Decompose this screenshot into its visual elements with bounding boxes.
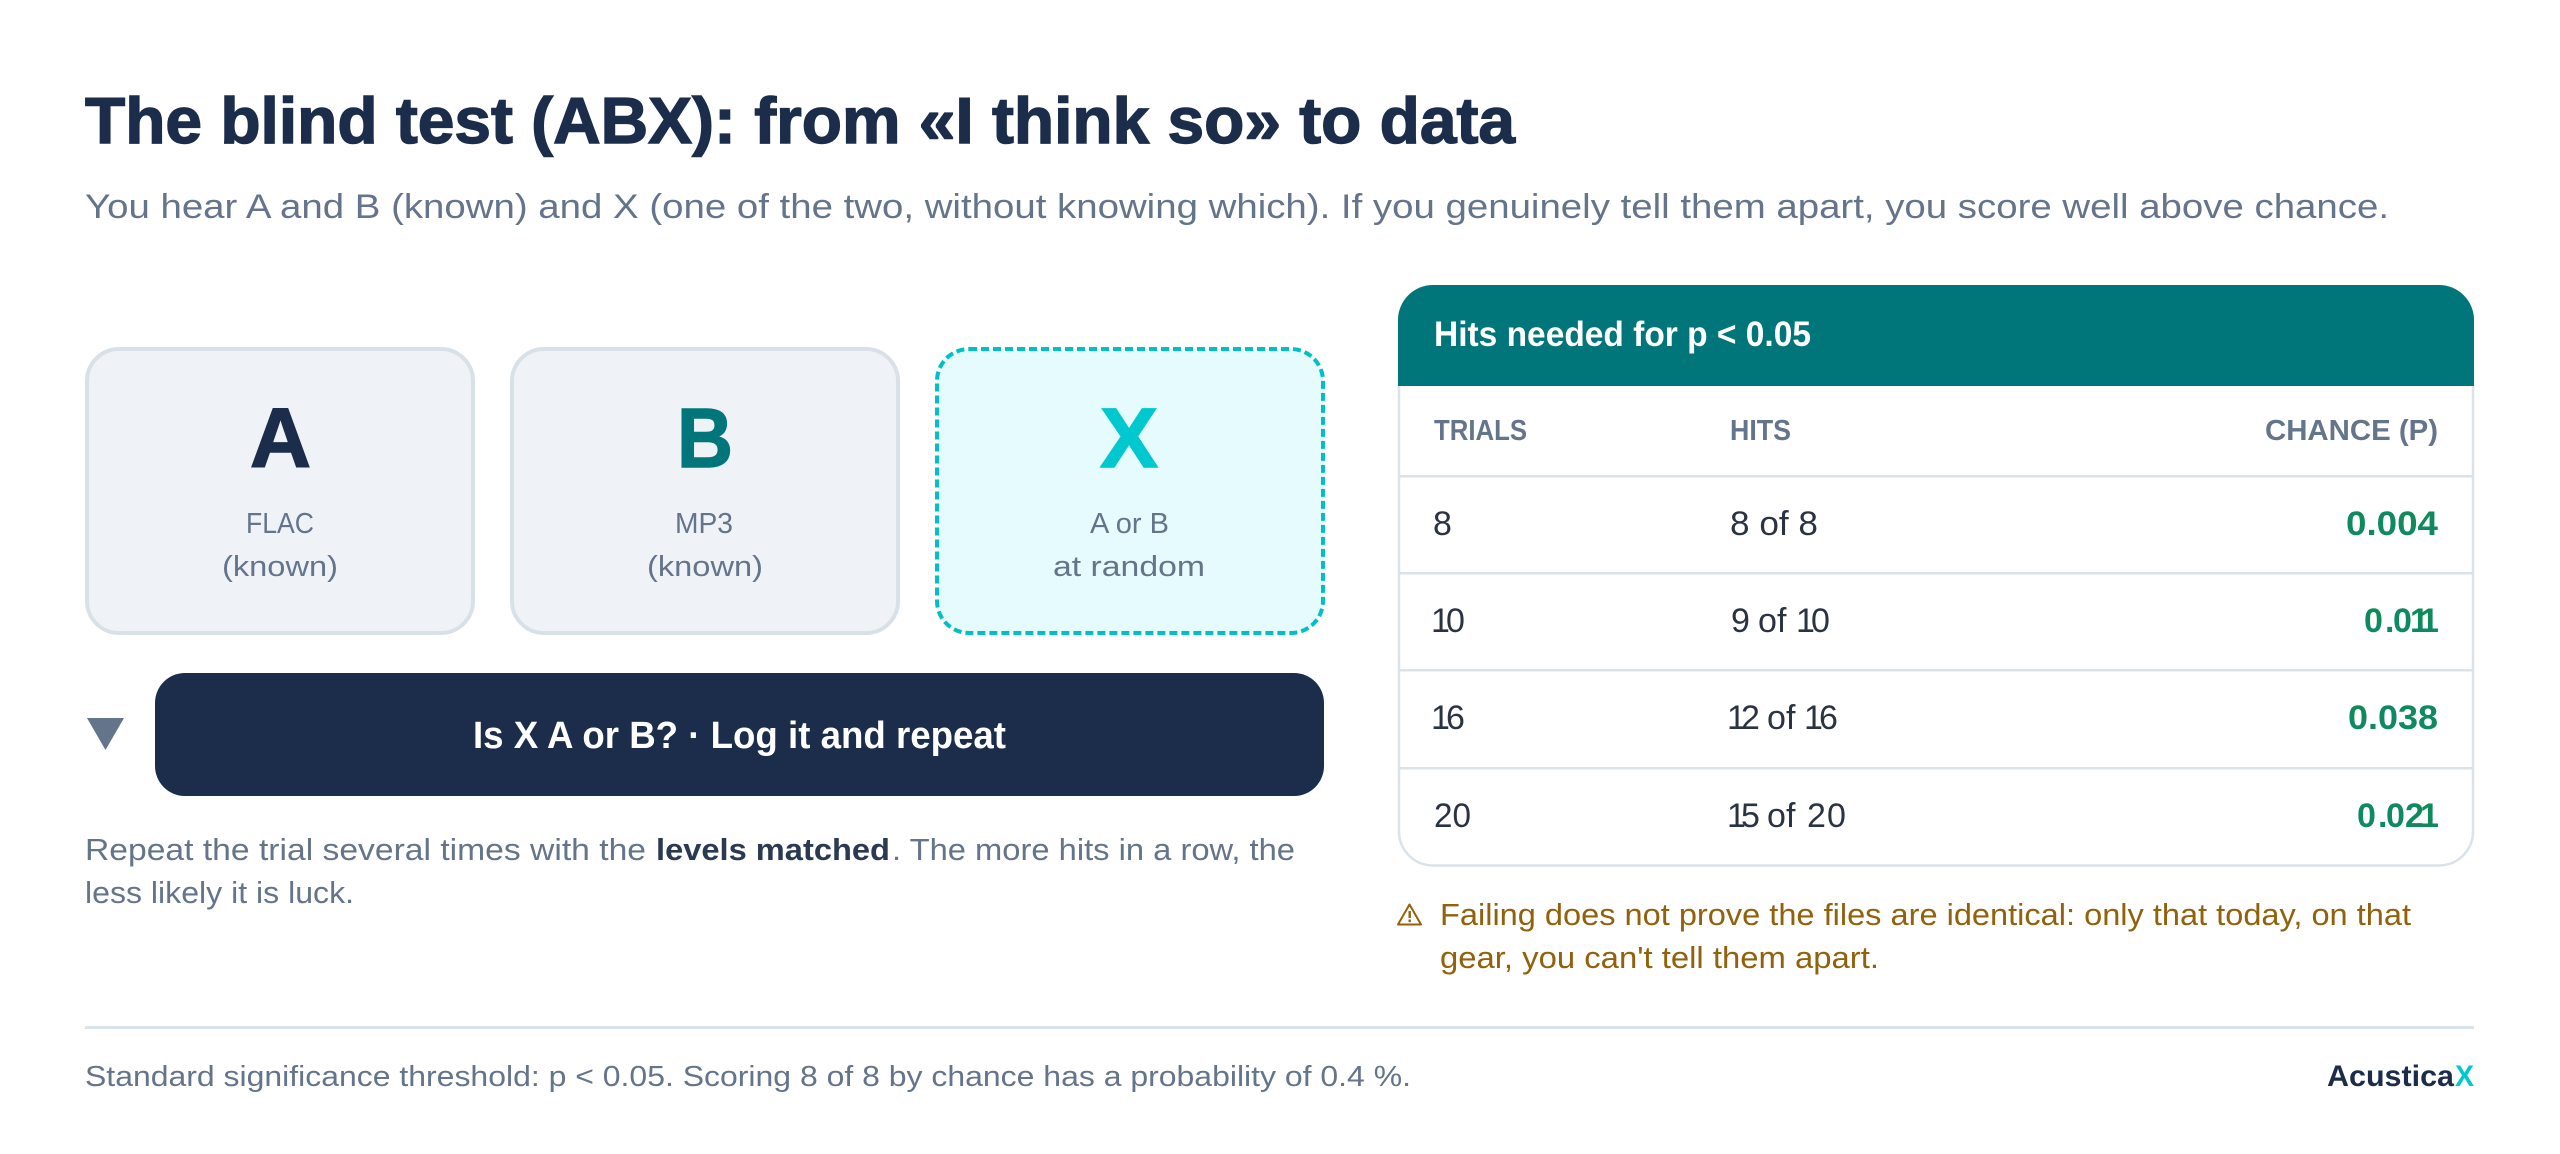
table header band: Hits needed for p < 0.05: [1434, 315, 1811, 354]
letter B: B: [677, 391, 733, 485]
letter X: X: [1100, 391, 1158, 485]
action bar: [155, 673, 1324, 796]
label: FLAC (known): (known): [222, 551, 338, 583]
label: FLAC (known): [222, 508, 338, 583]
explanatory text: Repeat the trial several times with the: [85, 832, 646, 867]
row: 10 trials: 10: [1431, 602, 1465, 640]
title: The blind test (ABX): from «I think so» to data: [85, 84, 1516, 157]
row: 20 trials: 0.021: [2357, 797, 2439, 835]
row: 16 trials: 16: [1431, 699, 1465, 737]
warning note: [1440, 897, 2411, 975]
row: 16 trials: 0.038: [2348, 699, 2438, 737]
brand logo: Acustica: [2327, 1060, 2454, 1093]
row: 10 trials: 9 of 10: [1731, 602, 1830, 640]
column headings: TRIALS: [1434, 415, 1527, 447]
action bar: Is X A or B? · Log it and repeat: [473, 715, 1006, 757]
icon: down arrow: [87, 718, 124, 750]
panel: card B: [512, 349, 898, 633]
icon: warning: [1398, 904, 1421, 924]
label: FLAC (known): FLAC: [246, 508, 314, 540]
row: 8 trials: 0.004: [2346, 505, 2438, 543]
explanatory text: levels matched: [656, 832, 890, 867]
row: 16 trials: 12 of 16: [1727, 699, 1838, 737]
explanatory text: less likely it is luck.: [85, 875, 354, 910]
row: 10 trials: [1431, 602, 2439, 640]
footer note: Standard significance threshold: p < 0.05. Scoring 8 of 8 by chance has a probability of 0.4 %.: [85, 1061, 1411, 1093]
label: MP3 (known): [647, 508, 763, 583]
label: A or B at random: [1053, 508, 1205, 583]
column headings: HITS: [1730, 415, 1791, 447]
brand logo: X: [2455, 1060, 2474, 1093]
column headings: CHANCE (P): [2265, 415, 2438, 447]
label: A or B at random: A or B: [1090, 508, 1169, 540]
explanatory text: . The more hits in a row, the: [892, 832, 1295, 867]
warning note: Failing does not prove the files are identical: only that today, on that: [1440, 897, 2411, 932]
explanatory text: [85, 832, 1295, 910]
label: MP3 (known): MP3: [675, 508, 733, 540]
row: 10 trials: 0.011: [2364, 602, 2439, 640]
row: 16 trials: [1431, 699, 2438, 737]
column headings: [1434, 415, 2438, 447]
row: 8 trials: 8 of 8: [1730, 505, 1818, 543]
label: MP3 (known): (known): [647, 551, 763, 583]
panel: card A: [87, 349, 473, 633]
letter A: A: [250, 391, 311, 485]
row: 8 trials: [1433, 505, 2438, 543]
warning note: gear, you can't tell them apart.: [1440, 940, 1879, 975]
label: A or B at random: at random: [1053, 551, 1205, 583]
panel: hits table: [1398, 285, 2474, 866]
panel: card X: [937, 349, 1323, 633]
row: 20 trials: 15 of 20: [1727, 797, 1846, 835]
row: 20 trials: 20: [1434, 797, 1471, 835]
row: 8 trials: 8: [1433, 505, 1452, 543]
table header band: [1398, 285, 2474, 386]
subtitle: You hear A and B (known) and X (one of the two, without knowing which). If you genuinely tell them apart, you score well above chance.: [85, 188, 2389, 226]
row: 20 trials: [1434, 797, 2439, 835]
